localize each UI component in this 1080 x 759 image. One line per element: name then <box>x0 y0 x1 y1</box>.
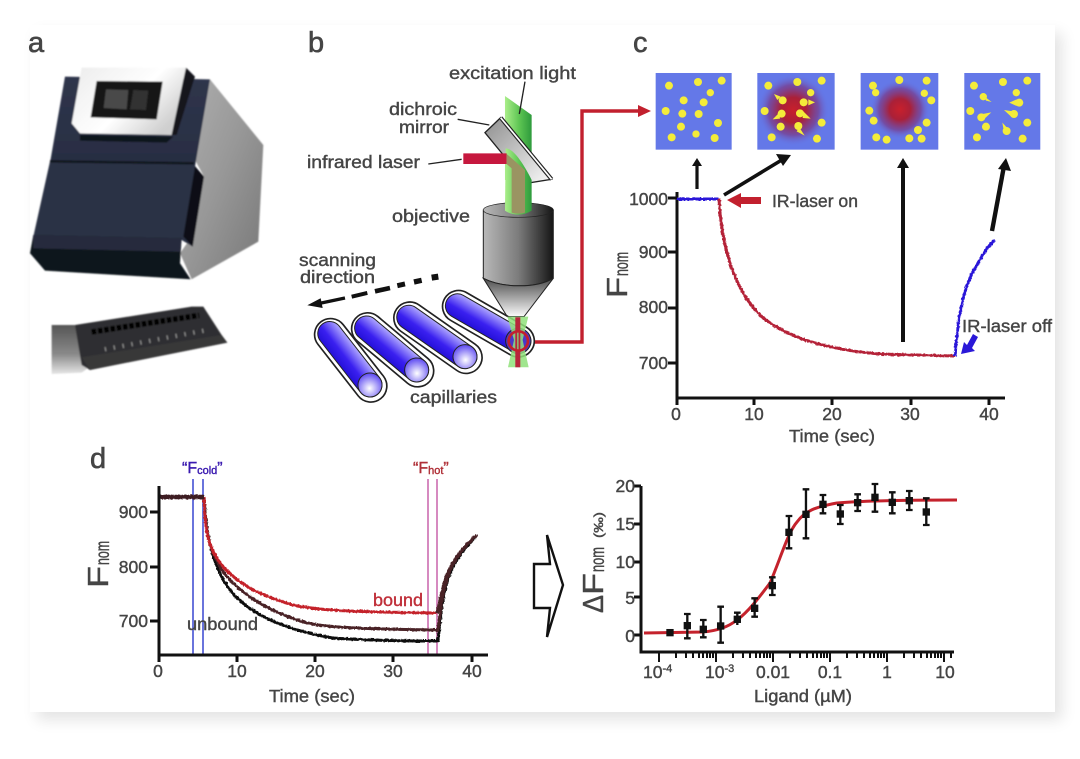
y axis title <box>83 541 115 588</box>
IR-laser on callout: IR-laser on <box>772 191 858 211</box>
thumbnail 2 <box>757 73 835 150</box>
y tick labels: 900 <box>639 242 668 262</box>
red connector arrow <box>535 105 651 342</box>
pointer arrows <box>692 154 1011 342</box>
y axis title: nom <box>93 541 114 565</box>
x tick labels <box>643 662 955 682</box>
y axis title: F <box>83 566 115 588</box>
x tick labels <box>153 661 482 681</box>
x axis title: Time (sec) <box>269 686 355 706</box>
y axis title: nom <box>612 252 633 276</box>
y axis title <box>602 252 634 298</box>
scanning direction label: direction <box>300 267 375 287</box>
panel c: time trace with thumbnails <box>602 27 1052 446</box>
y axis title: nom <box>588 547 609 572</box>
focus beam <box>507 317 529 367</box>
open arrow <box>534 535 563 637</box>
x tick labels: 20 <box>822 404 842 424</box>
x tick labels: 10 <box>744 404 764 424</box>
y tick labels: 0 <box>625 626 635 646</box>
panel d: bound and unbound traces <box>83 443 957 706</box>
x tick labels: 0 <box>671 404 681 424</box>
capillary tray photo <box>52 307 227 374</box>
bound label: bound <box>373 590 423 610</box>
scanning direction label: scanning <box>299 250 376 270</box>
dichroic mirror label: dichroic <box>389 99 457 119</box>
panel b: optical setup <box>299 27 651 408</box>
x tick labels: 1 <box>882 662 892 682</box>
excitation beam <box>505 96 532 180</box>
y axis title: (‰) <box>591 512 606 538</box>
y axis title: F <box>602 277 634 298</box>
y tick labels: 15 <box>616 514 635 534</box>
y axis title <box>578 512 610 613</box>
y tick labels: 10 <box>616 552 635 572</box>
y tick labels: 800 <box>639 297 668 317</box>
y tick labels <box>616 476 635 646</box>
objective <box>483 203 553 317</box>
y tick labels: 900 <box>119 502 148 522</box>
x tick labels: 0.1 <box>818 662 842 682</box>
dichroic mirror <box>485 118 552 183</box>
F hot window <box>413 460 449 655</box>
capillary 1 <box>308 312 393 408</box>
x tick labels: 10 <box>935 662 955 682</box>
label c: c <box>633 27 648 59</box>
F hot window: hot <box>428 465 443 477</box>
fit curve <box>644 500 957 633</box>
IR-laser on callout <box>727 191 858 211</box>
y tick labels: 700 <box>119 611 148 631</box>
diffusion thumbnails <box>656 73 1040 150</box>
unbound label: unbound <box>187 614 258 634</box>
y tick labels <box>629 189 668 373</box>
y tick labels: 5 <box>625 588 635 608</box>
scanning direction label <box>299 250 376 287</box>
objective label: objective <box>392 206 470 226</box>
x axis title: Time (sec) <box>789 426 875 446</box>
panel a: instrument <box>28 27 263 374</box>
x tick labels: 10 <box>643 662 662 682</box>
capillary 2 <box>345 306 440 393</box>
F cold window: cold <box>197 465 217 477</box>
x tick labels: 40 <box>462 661 482 681</box>
x tick labels: 20 <box>305 661 325 681</box>
thumbnail 1 <box>656 73 732 150</box>
data points with error bars <box>666 484 930 643</box>
thumbnail 3 <box>861 73 938 150</box>
F cold window: “F <box>182 460 197 477</box>
x axis title: Ligand (µM) <box>754 686 852 706</box>
x tick labels: 30 <box>900 404 920 424</box>
label a: a <box>28 27 45 59</box>
label d: d <box>90 443 106 475</box>
infrared beam <box>463 153 525 214</box>
x tick labels: 10 <box>705 662 724 682</box>
infrared laser label: infrared laser <box>307 152 420 172</box>
y tick labels: 800 <box>119 557 148 577</box>
label b: b <box>308 27 324 59</box>
x tick labels: -3 <box>724 663 734 675</box>
x tick labels: 30 <box>383 661 403 681</box>
capillary 4 <box>437 285 540 363</box>
dichroic mirror label: mirror <box>399 117 449 137</box>
F cold window: ” <box>217 460 223 477</box>
focus ring <box>509 331 528 351</box>
capillaries label: capillaries <box>410 387 497 407</box>
F hot window: “F <box>413 460 428 477</box>
y tick labels: 1000 <box>629 189 668 209</box>
capillary 3 <box>388 296 488 380</box>
x tick labels: 0 <box>153 661 163 681</box>
time trace chart <box>668 192 1005 405</box>
x tick labels <box>671 404 999 424</box>
scanning arrow <box>307 277 438 308</box>
y tick labels: 700 <box>639 353 668 373</box>
y tick labels: 20 <box>616 476 635 496</box>
F hot window: ” <box>443 460 449 477</box>
dichroic mirror label <box>389 99 457 137</box>
thumbnail 4 <box>964 73 1040 150</box>
excitation light label: excitation light <box>449 63 576 83</box>
traces chart <box>150 486 488 662</box>
dose response chart <box>634 484 957 662</box>
lower excitation beam <box>505 148 532 215</box>
leader lines <box>428 82 525 164</box>
IR-laser off callout: IR-laser off <box>962 316 1052 336</box>
y tick labels <box>119 502 148 631</box>
IR-laser off callout <box>961 316 1052 354</box>
instrument photo <box>30 68 263 279</box>
F cold window <box>182 460 223 655</box>
x tick labels: 40 <box>979 404 999 424</box>
x tick labels: -4 <box>662 663 672 675</box>
x tick labels: 0.01 <box>756 662 790 682</box>
y axis title: Δ <box>578 595 610 613</box>
x tick labels: 10 <box>227 661 247 681</box>
y axis title: F <box>578 573 610 595</box>
